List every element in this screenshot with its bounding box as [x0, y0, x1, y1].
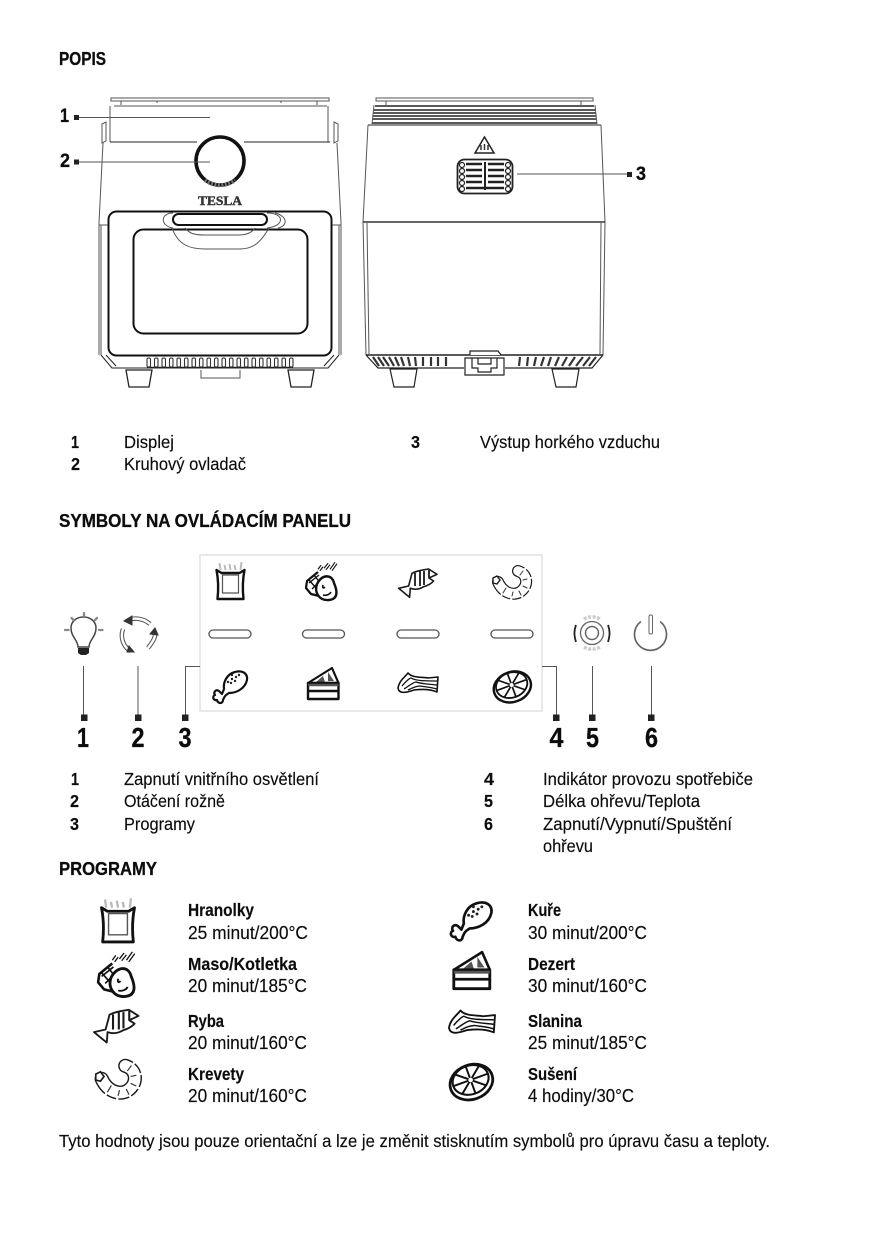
- program: krevety: 20 minut/160°C: [188, 1086, 307, 1106]
- legend: symbols: 3: [70, 814, 79, 834]
- callout: number 6: 6: [645, 722, 658, 753]
- base with vents: [101, 355, 339, 368]
- icon: meat: [306, 563, 336, 600]
- legend: symbols: 5: [484, 791, 493, 811]
- program: slanina: Slanina: [528, 1011, 582, 1031]
- program: maso: [98, 953, 307, 997]
- program: sušení: Sušení: [528, 1064, 578, 1084]
- icon: fish: [399, 569, 437, 597]
- icon: light bulb: [65, 613, 102, 655]
- callout: number 5: [586, 666, 599, 753]
- control knob: [196, 137, 244, 185]
- callout: 2 knob: 2: [60, 151, 70, 172]
- door handle: [163, 213, 285, 249]
- program: hranolky: Hranolky: [188, 900, 254, 920]
- icon: bacon: [398, 673, 438, 692]
- program: ryba: [94, 1010, 307, 1053]
- legend: symbols: Délka ohřevu/Teplota: [543, 791, 700, 811]
- legend: parts: Kruhový ovladač: [124, 454, 246, 474]
- callout: number 4: [542, 666, 564, 753]
- legend: parts: Displej: [124, 432, 174, 452]
- program: hranolky: 25 minut/200°C: [188, 923, 308, 943]
- callout: 3 hot air outlet: [517, 164, 646, 185]
- callout: number 3: [178, 666, 200, 753]
- callout: 2 knob: [60, 151, 210, 172]
- legend: symbols: 1: [71, 769, 79, 789]
- program: dezert: Dezert: [528, 954, 575, 974]
- program: dezert: [454, 952, 647, 996]
- panel: control panel: [200, 555, 542, 711]
- legend: parts: [71, 432, 660, 474]
- diagram: air fryer side view: [363, 98, 605, 387]
- icon: rotation arrows: [122, 616, 158, 652]
- callout: number 6: [645, 666, 658, 753]
- legend: parts: 2: [71, 454, 80, 474]
- callout: number 4: 4: [550, 722, 564, 753]
- callout: number 1: 1: [77, 722, 89, 753]
- footnote: Tyto hodnoty jsou pouze orientační a lze je změnit stisknutím symbolů pro úpravu času a teploty.: [59, 1131, 770, 1151]
- heading: symboly: SYMBOLY NA OVLÁDACÍM PANELU: [59, 510, 351, 531]
- air outlet vent: [458, 160, 512, 194]
- legend: symbols: Zapnutí vnitřního osvětlení: [124, 769, 319, 789]
- callout: number 2: [132, 666, 144, 753]
- callout: 1 display: [60, 106, 210, 127]
- program: slanina: 25 minut/185°C: [528, 1033, 647, 1053]
- heading: programy: PROGRAMY: [59, 858, 158, 879]
- legend: symbols: Zapnutí/Vypnutí/Spuštění: [543, 814, 732, 834]
- callout: number 3: 3: [178, 722, 192, 753]
- legend: symbols: [70, 769, 753, 856]
- icon: time temperature: [574, 617, 610, 649]
- legend: symbols: Otáčení rožně: [124, 791, 225, 811]
- program: krevety: Krevety: [188, 1064, 244, 1084]
- program: maso: Maso/Kotletka: [188, 954, 297, 974]
- program: krevety: [96, 1062, 307, 1106]
- callout: number 2: 2: [132, 722, 144, 753]
- program: kuře: [451, 900, 647, 943]
- legend: symbols: 4: [484, 769, 494, 789]
- logo: TESLA: [198, 194, 242, 208]
- legend: parts: 3: [411, 432, 420, 452]
- callout: number 1: [77, 666, 89, 753]
- program: ryba: 20 minut/160°C: [188, 1033, 307, 1053]
- program: dezert: 30 minut/160°C: [528, 976, 647, 996]
- icon: cake: [308, 668, 338, 699]
- legend: parts: Výstup horkého vzduchu: [480, 432, 660, 452]
- program: hranolky: [101, 898, 308, 943]
- legend: symbols: 6: [484, 814, 493, 834]
- indicator lights: [209, 630, 533, 638]
- callout: 1 display: 1: [60, 106, 69, 127]
- icon: fries: [216, 562, 244, 599]
- program: ryba: Ryba: [188, 1011, 224, 1031]
- diagram: air fryer front view: [99, 98, 341, 387]
- callout: 3 hot air outlet: 3: [636, 164, 646, 185]
- program: sušení: 4 hodiny/30°C: [528, 1086, 634, 1106]
- icon: dried orange: [489, 666, 535, 708]
- legend: symbols: ohřevu: [543, 836, 593, 856]
- program: kuře: 30 minut/200°C: [528, 923, 647, 943]
- legend: symbols: 2: [70, 791, 79, 811]
- program: slanina: [449, 1010, 647, 1053]
- heading: popis: POPIS: [59, 48, 106, 69]
- icon: shrimp: [493, 568, 531, 600]
- icon: chicken: [213, 671, 247, 703]
- base vents: [366, 351, 603, 375]
- icon: hot surface warning: [475, 137, 494, 153]
- legend: parts: 1: [71, 432, 79, 452]
- callout: number 5: 5: [586, 722, 599, 753]
- legend: symbols: Indikátor provozu spotřebiče: [543, 769, 753, 789]
- feet: [390, 369, 579, 387]
- door: [108, 212, 332, 356]
- program: sušení: [445, 1058, 634, 1106]
- feet: [126, 370, 314, 387]
- program: maso: 20 minut/185°C: [188, 976, 307, 996]
- program: kuře: Kuře: [528, 900, 561, 920]
- legend: symbols: Programy: [124, 814, 195, 834]
- icon: power: [634, 615, 666, 650]
